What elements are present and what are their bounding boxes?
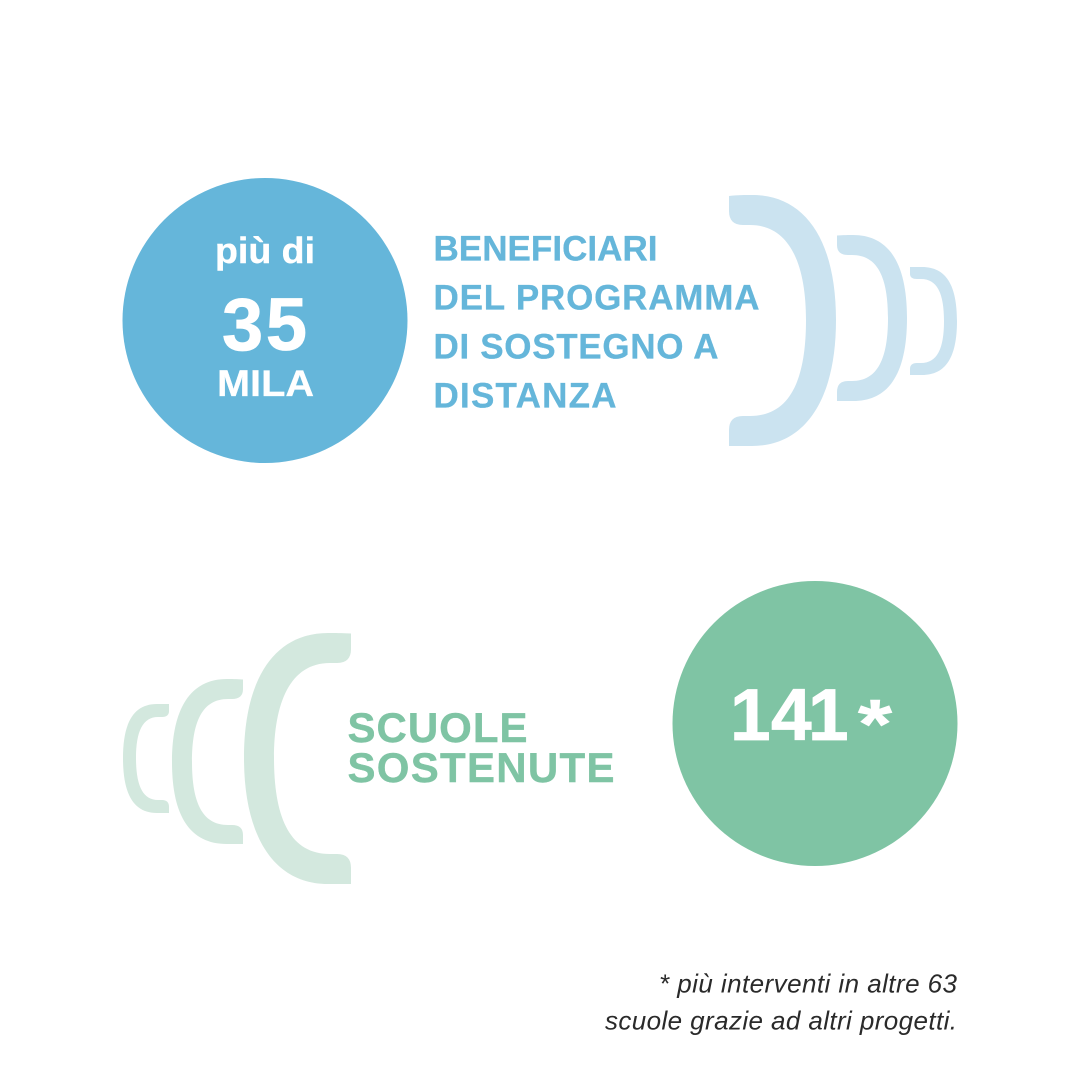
number: 35: 35 — [222, 283, 307, 366]
heading: scuole sostenute: SCUOLE — [348, 704, 528, 751]
panel: beneficiaries — [122, 178, 957, 463]
heading: scuole sostenute — [348, 704, 614, 791]
heading: beneficiari del programma: DEL PROGRAMMA — [434, 278, 760, 318]
number: 141*: 141 — [730, 675, 849, 756]
heading: scuole sostenute: SOSTENUTE — [348, 744, 614, 791]
icon: blue sound-wave brackets — [729, 195, 957, 446]
heading: beneficiari del programma — [434, 230, 760, 416]
heading: beneficiari del programma: DISTANZA — [434, 377, 616, 416]
icon: green sound-wave brackets — [123, 633, 351, 884]
number: 141*: * — [858, 685, 893, 763]
label: MILA: MILA — [217, 363, 314, 404]
green circle with figure — [672, 581, 958, 866]
panel: schools — [123, 581, 958, 884]
blue circle with figure — [122, 178, 408, 463]
footnote: * più interventi in altre 63 — [659, 968, 958, 998]
label: più di: più di — [215, 230, 315, 271]
heading: beneficiari del programma: DI SOSTEGNO A — [434, 328, 718, 367]
heading: beneficiari del programma: BENEFICIARI — [434, 230, 658, 269]
footnote — [605, 968, 958, 1035]
number: 141* — [730, 675, 893, 763]
footnote: scuole grazie ad altri progetti. — [605, 1005, 957, 1035]
